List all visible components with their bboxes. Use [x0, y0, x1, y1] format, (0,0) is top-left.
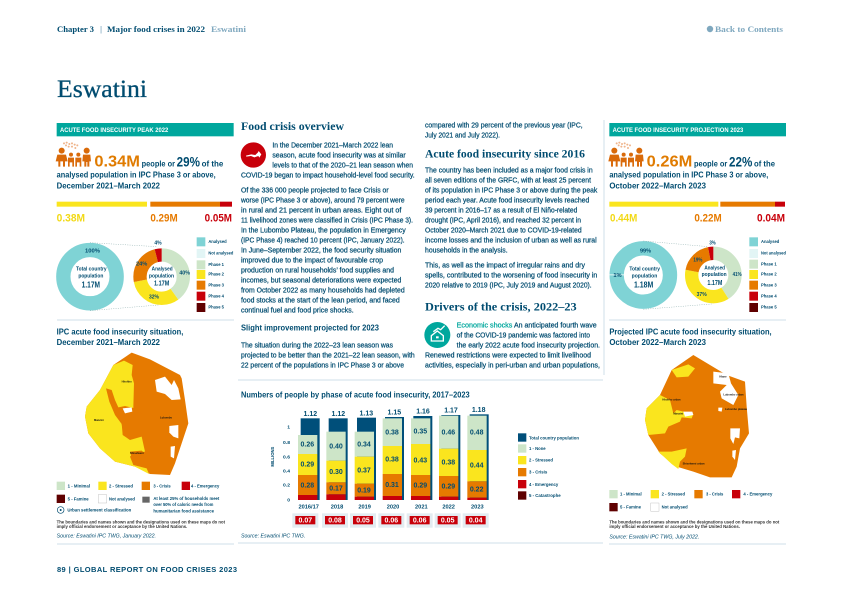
stacked bars — [298, 407, 489, 500]
donut: total country population: 1.18M — [634, 281, 654, 290]
headline statistic: December 2021–March 2022 — [57, 180, 160, 190]
map heading: December 2021–March 2022 — [57, 337, 160, 347]
donut: total country population: 1.17M — [82, 281, 100, 290]
page title: Eswatini — [57, 76, 147, 103]
bar 2019: 0.19 — [357, 487, 371, 494]
since 2016 text: income losses and the inclusion of urban as well as rural — [425, 235, 597, 244]
icon: family — [56, 142, 91, 167]
y axis: 0.6 — [283, 454, 290, 460]
y axis: 1 — [287, 425, 290, 431]
phase population bar: 0.05M — [205, 213, 232, 225]
bar 2023: 0.22 — [470, 487, 484, 494]
phase 4 value boxes: 0.05 — [441, 518, 455, 525]
donut: total country population: Total country — [76, 267, 107, 273]
projection text: The situation during the 2022–23 lean season was — [241, 341, 393, 350]
page header: Eswatini — [211, 24, 247, 34]
map source: Source: Eswatini IPC TWG, January 2022. — [57, 534, 156, 540]
map of Eswatini, projected: Manzini — [673, 411, 683, 415]
bar 2020: 0.38 — [385, 430, 399, 437]
map of Eswatini, current: Shiselweni — [130, 451, 144, 455]
map legend: 1 - Minimal — [68, 484, 90, 489]
donut: total country population: population — [632, 274, 658, 280]
bar 2020: 0.38 — [385, 457, 399, 464]
year labels: 2020 — [387, 505, 399, 511]
donut: total country population: population — [78, 274, 104, 280]
map of Eswatini, projected — [645, 355, 749, 477]
year labels: 2022 — [442, 505, 455, 511]
donut legend: Phase 1 — [761, 261, 777, 266]
donut: analysed population: Analysed — [152, 267, 173, 273]
bar 2021 — [411, 409, 432, 500]
overview text: improved due to the impact of favourable crop — [241, 256, 383, 265]
bar 2018: 0.17 — [329, 485, 343, 492]
phase 4 value boxes: 0.05 — [356, 518, 370, 525]
page header: Major food crises in 2022 — [107, 24, 205, 34]
bar 2020: 1.15 — [388, 410, 401, 417]
since 2016 text: period each year. Acute food insecurity levels reached — [425, 195, 589, 204]
phase population bar: 0.29M — [150, 213, 178, 225]
headline statistic: October 2022–March 2023 — [609, 180, 706, 190]
headline statistic: of the — [754, 159, 775, 169]
bar 2016/17: 1.12 — [304, 411, 317, 418]
map legend: humanitarian food assistance — [153, 508, 215, 513]
donut legend: Not analysed — [208, 251, 233, 256]
map legend: Not analysed — [109, 497, 135, 502]
bar 2022 — [439, 408, 460, 500]
year labels: 2019 — [358, 505, 371, 511]
panel heading bar: ACUTE FOOD INSECURITY PROJECTION 2023 — [613, 127, 744, 134]
chart legend: 2 - Stressed — [529, 458, 553, 463]
phase population bar: 0.44M — [610, 213, 637, 225]
icon: economic shocks — [424, 322, 450, 348]
phase population bar: 0.04M — [757, 213, 785, 225]
bar 2022: 0.29 — [442, 483, 455, 490]
donut: analysed population: 41% — [733, 272, 742, 278]
column: since 2016 and drivers — [424, 121, 600, 370]
continued text: July 2021 and July 2022). — [425, 131, 500, 140]
map of Eswatini, current: Lubombo — [160, 415, 172, 419]
map legend: 3 - Crisis — [706, 492, 724, 497]
since 2016 text: 39 percent in 2016–17 as a result of El Niño-related — [425, 205, 577, 214]
bar 2018 — [326, 411, 348, 500]
since 2016 text: 2020 relative to 2019 (IPC, July 2019 and August 2020). — [425, 280, 592, 289]
headline statistic: 29% — [177, 154, 200, 170]
chart legend: 1 - None — [529, 446, 546, 451]
map of Eswatini, current — [85, 353, 188, 475]
phase population bar: 0.22M — [694, 213, 722, 225]
map of Eswatini, projected: Lubombo plateau — [725, 407, 748, 411]
heading: Acute food insecurity since 2016 — [425, 147, 585, 161]
donut: total country population: 100% — [85, 249, 100, 255]
drivers text — [425, 321, 600, 370]
donut legend: Not analysed — [761, 251, 786, 256]
bar 2023: 1.18 — [472, 407, 486, 414]
headline statistic: analysed population in IPC Phase 3 or above, — [609, 170, 768, 180]
bar 2022: 1.17 — [444, 408, 458, 415]
map of Eswatini, projected: Shiselweni urban — [683, 462, 705, 466]
donut legend — [197, 237, 233, 312]
map legend: 5 - Famine — [68, 497, 89, 502]
bar 2016/17: 0.26 — [301, 442, 314, 449]
continued text: compared with 29 percent of the previous year (IPC, — [425, 121, 583, 130]
overview text: In the Lubombo Plateau, the population in Emergency — [241, 226, 406, 235]
map disclaimer: imply official endorsement or acceptance by the United Nations. — [57, 524, 187, 529]
overview text: In June–September 2022, the food security situation — [241, 246, 401, 255]
headline statistic: analysed population in IPC Phase 3 or above, — [57, 170, 216, 180]
panel heading bar — [57, 123, 234, 136]
map disclaimer: imply official endorsement or acceptance by the United Nations. — [609, 524, 740, 529]
phase population bar — [609, 202, 785, 225]
since 2016 text: October 2020–March 2021 due to COVID-19-related — [425, 225, 582, 234]
map legend: 2 - Stressed — [109, 484, 133, 489]
donut: total country population — [609, 248, 670, 302]
bar 2019 — [355, 410, 376, 500]
y axis: 0.2 — [283, 483, 290, 489]
phase 4 value boxes: 0.08 — [328, 518, 342, 525]
since 2016 text: This, as well as the impact of irregular rains and dry — [425, 260, 585, 269]
donut: analysed population: 1.17M — [707, 280, 722, 287]
map disclaimer: The boundaries and names shown and the designations used on these maps do not — [57, 519, 226, 524]
chart heading: Numbers of people by phase of acute food insecurity, 2017–2023 — [241, 389, 470, 399]
back to contents link: Back to Contents — [715, 24, 784, 34]
bar 2023: 0.44 — [470, 462, 484, 469]
page footer: 89 | GLOBAL REPORT ON FOOD CRISES 2023 — [57, 565, 237, 574]
map legend: Not analysed — [662, 505, 688, 510]
drivers text: of the COVID-19 pandemic was factored into — [457, 331, 590, 340]
map legend: At least 25% of households meet — [153, 496, 220, 501]
overview text: (IPC Phase 4) reached 10 percent (IPC, January 2022). — [241, 236, 405, 245]
map legend: 1 - Minimal — [620, 492, 642, 497]
donut legend: Phase 2 — [761, 272, 777, 277]
donut: analysed population: 37% — [697, 292, 707, 298]
donut legend: Phase 4 — [208, 293, 224, 298]
panel: map October 2022 to March 2023 — [609, 326, 780, 540]
donut legend: Analysed — [208, 239, 227, 244]
since 2016 text: The country has been included as a major food crisis in — [425, 165, 593, 174]
map disclaimer: The boundaries and names shown and the designations used on these maps do not — [609, 519, 780, 524]
donut: total country population — [63, 249, 117, 303]
projection text: 22 percent of the populations in IPC Phase 3 or above — [241, 361, 404, 370]
bar 2020: 0.31 — [385, 482, 399, 489]
projection text — [241, 341, 415, 370]
bar 2018: 0.40 — [329, 443, 343, 450]
page header: | — [100, 25, 102, 34]
bar 2021: 0.35 — [414, 429, 427, 436]
overview text: food stocks at the start of the lean period, and faced — [241, 296, 400, 305]
y axis: 0.4 — [283, 469, 290, 475]
overview text: season, acute food insecurity was at similar — [272, 151, 406, 160]
map of Eswatini, projected: Lubombo urban — [723, 393, 744, 397]
headline statistic: people or — [694, 159, 728, 169]
bar 2019: 1.13 — [360, 410, 373, 417]
map of Eswatini, current: Hhohho — [122, 380, 132, 384]
y axis: MILLIONS — [270, 447, 275, 467]
donut: total country population: 1% — [613, 273, 622, 279]
heading: Drivers of the crisis, 2022–23 — [425, 300, 577, 314]
donut: analysed population: population — [149, 273, 174, 279]
projection text: projected to be better than the 2021–22 lean season, with — [241, 351, 415, 360]
since 2016 text: all seven editions of the GRFC, with at least 25 percent — [425, 175, 591, 184]
headline statistic: 0.26M — [647, 154, 692, 171]
chart legend — [518, 433, 579, 500]
map heading: October 2022–March 2023 — [609, 337, 706, 347]
year labels: 2023 — [471, 505, 484, 511]
overview text: levels to that of the 2020–21 lean season when — [272, 161, 413, 170]
donut: analysed population: 3% — [709, 241, 716, 247]
map legend: 4 - Emergency — [191, 484, 220, 489]
map of Eswatini, projected: Hlane — [719, 375, 727, 379]
donut legend: Phase 5 — [208, 305, 224, 310]
donut: analysed population: population — [702, 272, 727, 278]
bar 2021: 0.43 — [414, 457, 427, 464]
map legend: 2 - Stressed — [662, 492, 685, 497]
bar 2021: 0.29 — [414, 482, 427, 489]
year labels: 2021 — [415, 505, 428, 511]
chart legend: Total country population — [529, 436, 579, 441]
map of Eswatini, current: Manzini — [94, 418, 104, 422]
since 2016 text: households in the analysis. — [425, 245, 508, 254]
y axis — [270, 425, 290, 504]
donut: analysed population — [90, 241, 190, 311]
map legend: over 50% of caloric needs from — [153, 502, 213, 507]
bar 2016/17: 0.29 — [301, 462, 314, 469]
map legend: 3 - Crisis — [153, 484, 171, 489]
page header: Chapter 3 — [57, 24, 94, 34]
overview text: 11 livelihood zones were classified in Crisis (IPC Phase 3). — [241, 216, 413, 225]
overview text: production on rural households’ food supplies and — [241, 266, 394, 275]
headline statistic — [609, 154, 775, 190]
headline statistic: 22% — [729, 154, 753, 170]
panel: stacked bar chart by phase — [241, 389, 579, 539]
icon: family — [608, 142, 644, 167]
chart legend: 5 - Catastrophe — [529, 493, 561, 498]
bar 2022: 0.38 — [442, 459, 455, 466]
overview text: worse (IPC Phase 3 or above), around 79 percent were — [240, 196, 405, 205]
map legend: Urban settlement classification — [67, 507, 132, 512]
drivers text: activities, especially in peri-urban and urban populations, — [425, 361, 600, 370]
year labels — [298, 505, 484, 511]
panel: acute food insecurity projection 2023 — [608, 123, 786, 312]
overview text: incomes, but seasonal deteriorations were expected — [241, 276, 401, 285]
column: food crisis overview — [240, 119, 415, 370]
bar 2016/17: 0.28 — [301, 482, 314, 489]
bar 2023 — [467, 407, 489, 500]
phase 4 value boxes: 0.07 — [299, 518, 312, 525]
donut legend: Phase 1 — [208, 262, 224, 267]
donut legend: Analysed — [761, 239, 779, 244]
page header — [57, 24, 247, 34]
since 2016 text — [425, 165, 598, 289]
since 2016 text: of its population in IPC Phase 3 or above during the peak — [425, 185, 598, 194]
overview text: continual fuel and food price shocks. — [241, 306, 354, 315]
headline statistic — [57, 154, 224, 190]
map heading: IPC acute food insecurity situation, — [57, 326, 183, 336]
bar 2019: 0.37 — [357, 467, 371, 474]
donut legend: Phase 3 — [761, 282, 777, 287]
continued text — [425, 121, 583, 140]
y axis: 0 — [287, 498, 290, 504]
drivers text: the early 2022 acute food insecurity projection. — [457, 341, 600, 350]
chart legend: 4 - Emergency — [529, 482, 559, 487]
donut legend: Phase 3 — [208, 282, 224, 287]
chart source: Source: Eswatini IPC TWG. — [241, 533, 305, 539]
year labels: 2018 — [331, 505, 343, 511]
bar 2022: 0.46 — [442, 430, 455, 437]
panel: acute food insecurity peak 2022 — [56, 123, 234, 312]
bar 2019: 0.34 — [357, 441, 371, 448]
bar 2023: 0.48 — [470, 430, 484, 437]
donut: analysed population: 4% — [154, 241, 162, 247]
donut: analysed population: 19% — [693, 257, 702, 263]
year labels: 2016/17 — [298, 505, 319, 511]
since 2016 text: spells, contributed to the worsening of food insecurity in — [425, 270, 597, 279]
drivers text: Renewed restrictions were expected to limit livelihood — [425, 351, 591, 360]
overview text — [240, 141, 415, 315]
map disclaimer — [57, 519, 226, 529]
panel heading bar — [609, 123, 786, 136]
phase population bar: 0.38M — [57, 213, 85, 225]
phase 4 value boxes: 0.06 — [413, 518, 427, 525]
map disclaimer — [609, 519, 780, 529]
overview text: In the December 2021–March 2022 lean — [272, 141, 393, 150]
donut: analysed population — [643, 241, 742, 309]
panel heading bar: ACUTE FOOD INSECURITY PEAK 2022 — [60, 127, 169, 134]
map legend — [609, 490, 773, 511]
panel: map December 2021 to March 2022 — [57, 326, 226, 540]
overview text: in rural and 21 percent in urban areas. Eight out of — [241, 206, 402, 215]
map of Eswatini, projected: Hhohho urban — [662, 398, 681, 402]
donut: total country population: Total country — [629, 267, 661, 273]
icon: red arrow circle — [241, 142, 266, 168]
overview text: from October 2022 as many households had depleted — [241, 286, 405, 295]
chart legend: 3 - Crisis — [529, 470, 548, 475]
donut: analysed population: 40% — [179, 270, 190, 276]
phase 4 value boxes: 0.04 — [469, 518, 483, 525]
phase population bar — [57, 202, 232, 225]
overview text: COVID-19 began to impact household-level food security. — [241, 171, 415, 180]
phase 4 value boxes: 0.06 — [385, 518, 398, 525]
donut: analysed population: Analysed — [704, 265, 725, 271]
bar 2018: 0.30 — [329, 469, 343, 476]
map heading — [57, 326, 183, 347]
map source: Source: Eswatini IPC TWG, July 2022. — [609, 534, 699, 540]
subheading: Slight improvement projected for 2023 — [241, 324, 380, 333]
donut: total country population: 99% — [640, 249, 651, 255]
bar 2021: 1.16 — [416, 409, 430, 416]
drivers text: An anticipated fourth wave — [514, 321, 597, 330]
headline statistic: of the — [202, 159, 224, 169]
bar 2016/17 — [298, 411, 320, 500]
bar 2020 — [383, 410, 404, 500]
drivers text: Economic shocks — [457, 321, 513, 330]
map legend: 5 - Famine — [620, 505, 642, 510]
donut legend: Phase 4 — [761, 293, 777, 298]
headline statistic: people or — [142, 159, 176, 169]
donut: analysed population: 1.17M — [154, 281, 169, 288]
donut legend: Phase 2 — [208, 272, 224, 277]
map legend: 4 - Emergency — [743, 492, 773, 497]
headline statistic: 0.34M — [94, 154, 140, 171]
donut legend — [749, 237, 786, 312]
since 2016 text: drought (IPC, April 2016), and reached 32 percent in — [425, 215, 581, 224]
heading: Food crisis overview — [241, 119, 344, 133]
donut: analysed population: 24% — [136, 262, 147, 268]
map heading — [609, 326, 772, 347]
map heading: Projected IPC acute food insecurity situation, — [609, 326, 772, 336]
map legend — [57, 482, 220, 513]
bar 2018: 1.12 — [332, 411, 345, 418]
y axis: 0.8 — [283, 440, 290, 446]
donut: analysed population: 32% — [149, 295, 159, 301]
donut legend: Phase 5 — [761, 305, 777, 310]
overview text: Of the 336 000 people projected to face Crisis or — [241, 186, 389, 195]
phase 4 value boxes — [292, 513, 489, 528]
